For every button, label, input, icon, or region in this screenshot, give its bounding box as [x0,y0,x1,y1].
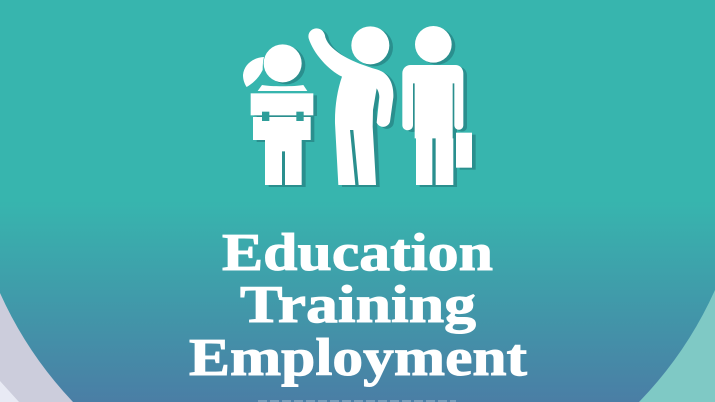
icon: person with raised arm [308,26,393,185]
right corner background: pale teal [600,270,715,402]
title line: Employment: Employment [189,329,527,387]
title [189,224,527,387]
icon shadow [254,28,476,187]
icon: person with briefcase [402,26,472,185]
cropped subtitle remnant [258,400,456,402]
title line: Training: Training [240,276,476,334]
title line: Education: Education [222,224,493,282]
icon: three people [243,26,476,187]
left corner background: lavender [0,270,120,402]
icon: girl with folder [243,44,313,185]
